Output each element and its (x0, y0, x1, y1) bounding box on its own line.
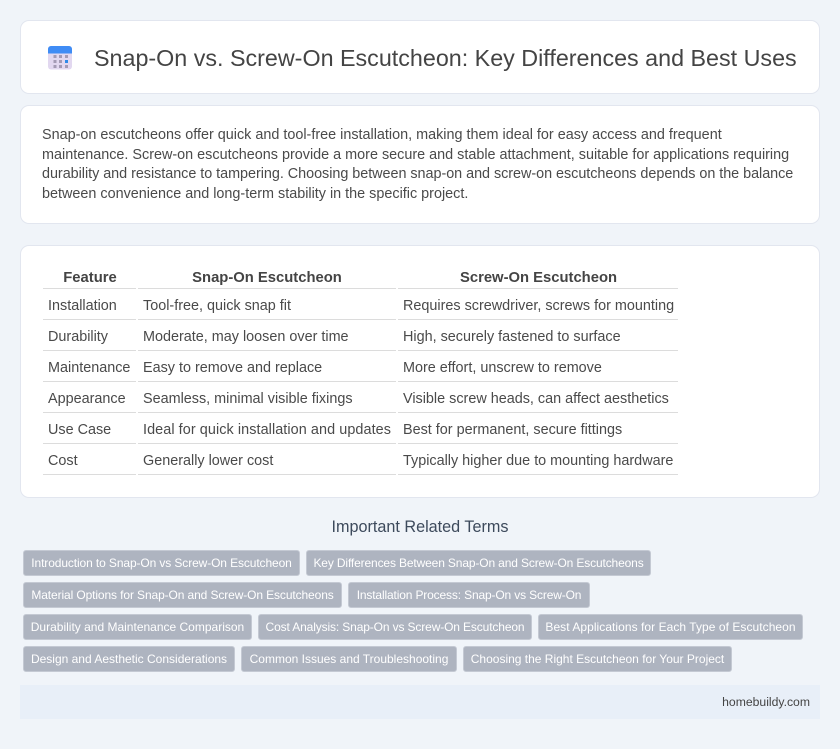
icon: calendar (48, 46, 72, 70)
footer source text: homebuildy.com (722, 695, 810, 709)
row: durability: High, securely fastened to surface (403, 329, 621, 345)
row: installation: Tool-free, quick snap fit (143, 298, 291, 314)
tag: Key Differences Between Snap-On and Screw-On Escutcheons (313, 556, 644, 570)
row: cost (48, 453, 673, 469)
tag (463, 646, 732, 672)
tag (23, 646, 235, 672)
row: use case: Best for permanent, secure fittings (403, 422, 622, 438)
row: use case (48, 422, 622, 438)
table header: Snap-On Escutcheon (192, 270, 342, 286)
tag (258, 614, 532, 640)
row: use case: Use Case (48, 422, 111, 438)
heading: important related terms: Important Related Terms (332, 518, 508, 536)
tag: Material Options for Snap-On and Screw-On Escutcheons (31, 588, 334, 602)
tag: Introduction to Snap-On vs Screw-On Escutcheon (31, 556, 292, 570)
tag (23, 550, 300, 576)
tag (241, 646, 457, 672)
tag (23, 582, 342, 608)
related terms tags (23, 550, 803, 672)
row: durability: Durability (48, 329, 108, 345)
tag: Cost Analysis: Snap-On vs Screw-On Escutcheon (266, 620, 524, 634)
tag: Common Issues and Troubleshooting (250, 652, 448, 666)
row: installation: Requires screwdriver, screws for mounting (403, 298, 674, 314)
row: maintenance: More effort, unscrew to remove (403, 360, 602, 376)
table header (63, 270, 617, 286)
tag: Best Applications for Each Type of Escutcheon (545, 620, 796, 634)
tag (23, 614, 252, 640)
tag (306, 550, 651, 576)
row: installation (48, 298, 674, 314)
row: durability (48, 329, 621, 345)
panel: introduction text (20, 105, 820, 224)
row: cost: Cost (48, 453, 78, 469)
text block: introduction: maintenance. Screw-on escutcheons provide a more secure and stable attachment, suitable for applications requiring (42, 146, 789, 162)
tag (538, 614, 803, 640)
footer bar (20, 685, 820, 719)
tag: Design and Aesthetic Considerations (31, 652, 227, 666)
table header: Feature (63, 270, 117, 286)
row: installation: Installation (48, 298, 117, 314)
row: maintenance: Maintenance (48, 360, 130, 376)
text block: introduction: durability and resistance to tampering. Choosing between snap-on and screw-on escutcheons depends on the balance (42, 166, 793, 182)
row: maintenance (48, 360, 602, 376)
text block: introduction (42, 127, 793, 202)
row: durability: Moderate, may loosen over time (143, 329, 349, 345)
row: appearance (48, 391, 669, 407)
text block: introduction: Snap-on escutcheons offer quick and tool-free installation, making them ideal for easy access and frequent (42, 127, 722, 143)
row: maintenance: Easy to remove and replace (143, 360, 322, 376)
title: Snap-On vs. Screw-On Escutcheon: Key Differences and Best Uses (94, 45, 797, 71)
comparison table (43, 270, 678, 475)
row: cost: Generally lower cost (143, 453, 273, 469)
row: cost: Typically higher due to mounting hardware (403, 453, 673, 469)
row: appearance: Seamless, minimal visible fixings (143, 391, 353, 407)
tag: Durability and Maintenance Comparison (31, 620, 244, 634)
tag (348, 582, 590, 608)
text block: introduction: between convenience and long-term stability in the specific project. (42, 186, 468, 202)
row: appearance: Visible screw heads, can affect aesthetics (403, 391, 669, 407)
tag: Choosing the Right Escutcheon for Your Project (471, 652, 724, 666)
panel: title header (20, 20, 820, 94)
tag: Installation Process: Snap-On vs Screw-On (357, 588, 581, 602)
row: appearance: Appearance (48, 391, 126, 407)
panel: comparison table (20, 245, 820, 498)
table header: Screw-On Escutcheon (460, 270, 617, 286)
row: use case: Ideal for quick installation and updates (143, 422, 391, 438)
